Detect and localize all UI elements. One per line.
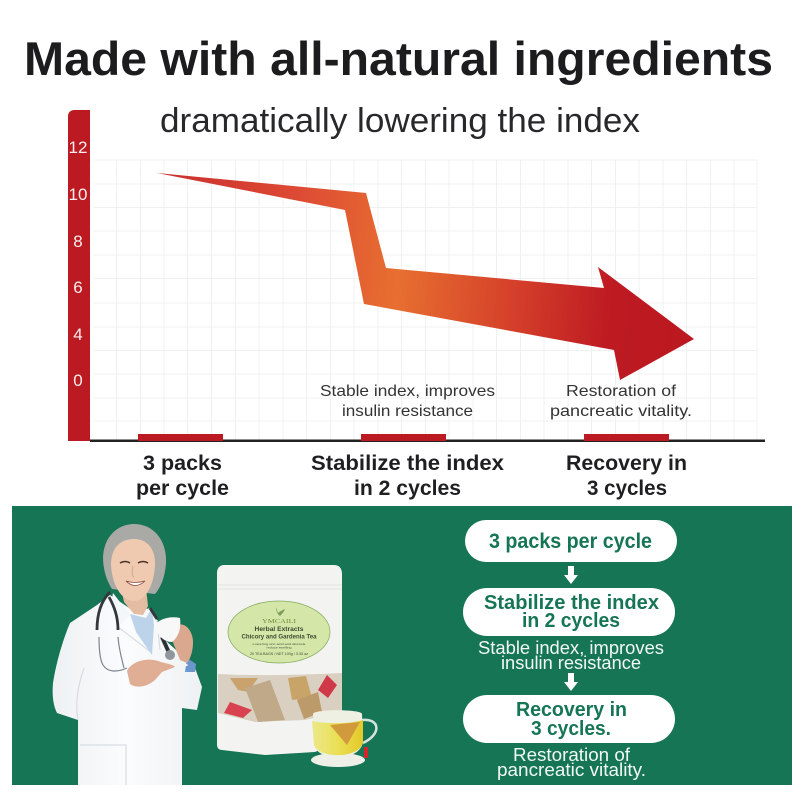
pill: 3 packs per cycle bbox=[465, 520, 677, 562]
annotation: stable index: insulin resistance bbox=[342, 403, 473, 420]
bar: 3 cycles bbox=[584, 434, 669, 441]
bar: 2 cycles bbox=[361, 434, 446, 441]
cuff bbox=[185, 658, 196, 672]
glass bbox=[313, 710, 363, 757]
tea bag window bbox=[218, 673, 342, 722]
bar: 3 packs bbox=[138, 434, 223, 441]
stethoscope bbox=[97, 592, 170, 671]
hair bbox=[103, 524, 166, 594]
arrow: falling index bbox=[157, 173, 694, 380]
x label: 3 packs bbox=[136, 452, 229, 500]
panel: green product section bbox=[12, 506, 792, 785]
arrow down 2 bbox=[564, 673, 578, 691]
pill: stabilize: Stabilize the index bbox=[484, 592, 659, 614]
text: restoration bbox=[497, 745, 646, 780]
label: Lowering uric acid and diuresis bbox=[252, 642, 306, 646]
title: Made with all-natural ingredients bbox=[24, 32, 773, 85]
tea bag in cup bbox=[330, 722, 360, 745]
lower hand bbox=[127, 660, 175, 687]
y axis labels: 6 bbox=[73, 278, 83, 297]
pouch body bbox=[217, 565, 342, 755]
handle bbox=[362, 720, 376, 743]
doctor figure bbox=[53, 524, 202, 785]
x label: 3 packs: 3 packs bbox=[143, 452, 222, 475]
nose bbox=[132, 566, 134, 577]
x label: stabilize bbox=[311, 452, 504, 500]
x label: recovery: 3 cycles bbox=[587, 477, 667, 500]
text: restoration: Restoration of bbox=[513, 745, 631, 765]
annotation: stable index: Stable index, improves bbox=[320, 383, 495, 400]
subtitle: dramatically lowering the index bbox=[160, 102, 640, 140]
x label: stabilize: Stabilize the index bbox=[311, 452, 504, 475]
annotation: restoration: Restoration of bbox=[566, 383, 677, 400]
saucer bbox=[311, 753, 365, 767]
annotation: stable index bbox=[320, 383, 495, 420]
tag bbox=[364, 747, 368, 758]
lab coat bbox=[53, 595, 202, 785]
x label: recovery: Recovery in bbox=[566, 452, 687, 475]
text: restoration: pancreatic vitality. bbox=[497, 760, 646, 780]
label: YMCAILI bbox=[262, 618, 296, 625]
neck bbox=[121, 588, 148, 615]
label: Herbal Extracts bbox=[254, 626, 304, 633]
upper hand bbox=[172, 624, 193, 663]
y axis bar bbox=[68, 110, 90, 441]
cup bbox=[154, 617, 180, 642]
pill: 3 packs per cycle: 3 packs per cycle bbox=[489, 530, 652, 553]
y axis labels: 0 bbox=[73, 371, 83, 390]
text: stable index bbox=[478, 638, 664, 673]
smile bbox=[126, 581, 145, 586]
annotation: restoration bbox=[550, 383, 692, 420]
label: Chicory and Gardenia Tea bbox=[242, 634, 317, 640]
y axis labels: 8 bbox=[73, 232, 83, 251]
x label: stabilize: in 2 cycles bbox=[354, 477, 461, 500]
text: stable index: insulin resistance bbox=[501, 653, 641, 673]
pill: stabilize: in 2 cycles bbox=[522, 610, 620, 632]
logo leaf bbox=[276, 607, 285, 616]
saucer bbox=[154, 662, 188, 668]
stethoscope head bbox=[165, 650, 175, 660]
pill: recovery: 3 cycles. bbox=[531, 718, 611, 740]
line chart bbox=[68, 110, 765, 500]
tea cup bbox=[311, 710, 376, 767]
text: stable index: Stable index, improves bbox=[478, 638, 664, 658]
y axis labels: 4 bbox=[73, 325, 83, 344]
pill: recovery: Recovery in bbox=[516, 699, 627, 721]
shirt bbox=[130, 608, 154, 655]
label: 20 TEA BAGS / NET 100g / 3.33 oz bbox=[250, 652, 308, 656]
y axis labels: 10 bbox=[69, 185, 87, 204]
y axis labels: 12 bbox=[69, 138, 87, 157]
face bbox=[111, 539, 155, 601]
zip seal bbox=[217, 585, 342, 589]
label: reduce swelling bbox=[266, 646, 292, 650]
coat fold shading bbox=[77, 620, 160, 785]
label bbox=[228, 601, 330, 663]
arrow down 1 bbox=[564, 566, 578, 584]
product pouch bbox=[217, 565, 342, 755]
pill: recovery bbox=[463, 695, 675, 743]
tea bbox=[312, 720, 363, 755]
shirt collar bbox=[111, 593, 130, 627]
pill: stabilize bbox=[463, 588, 675, 636]
eyes bbox=[120, 562, 148, 563]
x label: recovery bbox=[566, 452, 687, 500]
y axis labels bbox=[69, 138, 87, 390]
x axis line bbox=[90, 440, 765, 442]
annotation: restoration: pancreatic vitality. bbox=[550, 403, 692, 420]
x label: 3 packs: per cycle bbox=[136, 477, 229, 500]
